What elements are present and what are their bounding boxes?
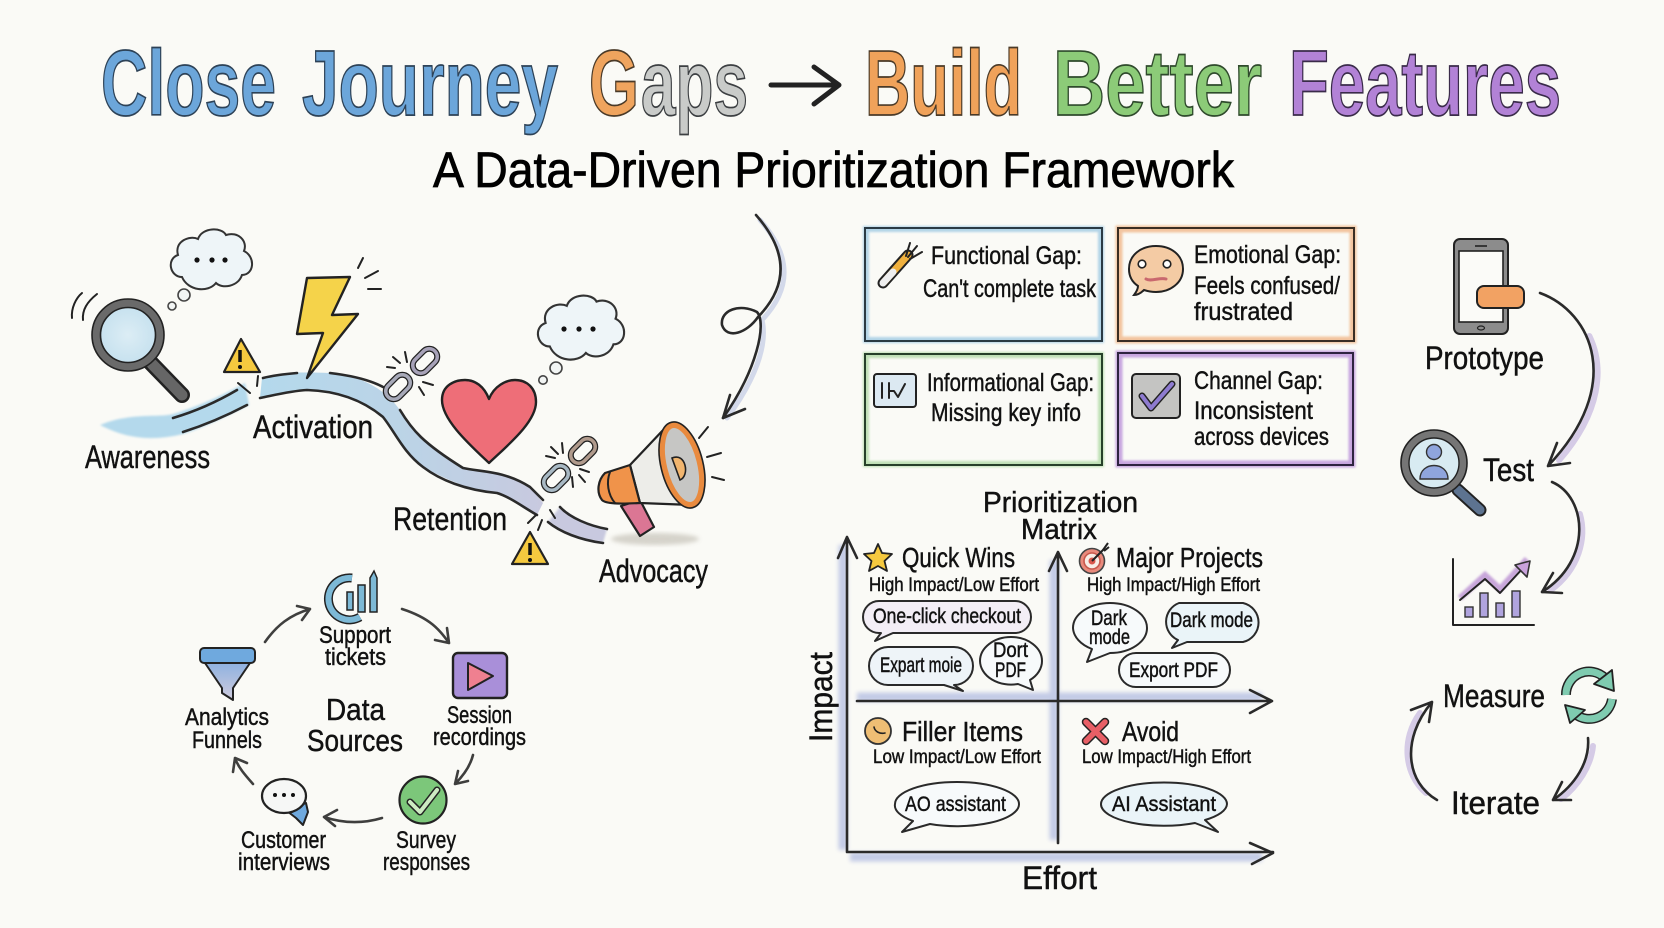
journey ribbon [100, 373, 607, 543]
label: customer interviews: interviews [238, 849, 330, 876]
label: session recordings: recordings [433, 724, 526, 751]
title: aps [641, 31, 748, 135]
arrow: title arrow [771, 67, 839, 104]
label: test: Test [1483, 452, 1534, 488]
quadrant: quick wins [863, 542, 1042, 691]
icon: lightning bolt [297, 258, 381, 378]
bubble: one-click checkout [863, 601, 1031, 641]
quadrant: quick wins: High Impact/Low Effort [869, 574, 1039, 596]
icon: pencil tool [883, 243, 922, 283]
arrow: test to measure chart [1542, 482, 1582, 594]
icon: magnifier [72, 293, 182, 395]
icon: clock coin [865, 718, 891, 744]
panel: data sources [185, 571, 526, 876]
label: analytics funnels: Funnels [192, 727, 262, 754]
label: survey responses [383, 827, 470, 876]
bubble: dark mode round [1073, 603, 1147, 662]
icon: warning 2 [512, 532, 548, 564]
arrows: data source cycle [233, 606, 473, 826]
heading: data sources: Data [326, 692, 386, 727]
panel: gap types [865, 228, 1354, 465]
heading: prioritization matrix: Matrix [1021, 514, 1097, 546]
label: Activation: Activation [253, 409, 373, 445]
card: informational gap: Informational Gap: [927, 369, 1094, 397]
bubble: dort pdf: Dort [993, 639, 1028, 662]
icon: chat bubble [262, 779, 308, 825]
arrow: iterate to measure [1407, 702, 1437, 800]
heading: data sources [307, 692, 403, 758]
card: channel gap: across devices [1194, 423, 1329, 451]
icon: red x [1086, 722, 1105, 741]
heading: data sources: Sources [307, 723, 403, 758]
card: functional gap: Can't complete task [923, 275, 1096, 303]
label: survey responses: responses [383, 849, 470, 876]
bubble: expart moie: Expart moie [880, 654, 962, 677]
icon: thought cloud 1 [168, 229, 252, 310]
label: survey responses: Survey [396, 827, 456, 854]
bubble: ai assistant: AI Assistant [1112, 793, 1216, 816]
icon: checkbox [1132, 374, 1180, 418]
label: analytics funnels [185, 704, 269, 754]
quadrant: avoid: Avoid [1122, 716, 1179, 747]
arrow: prototype to test [1540, 293, 1598, 468]
title: Better [1053, 31, 1262, 135]
icon: phone prototype [1454, 239, 1524, 334]
title: Journey [302, 31, 558, 135]
bubble: export pdf [1119, 653, 1230, 687]
icon: broken chain 1 [382, 345, 441, 403]
label: analytics funnels: Analytics [185, 704, 269, 731]
bubble: dark mode pill: Dark mode [1170, 609, 1253, 632]
bubble: ai assistant garbled: AO assistant [905, 793, 1006, 816]
arrow: loop into megaphone [722, 215, 784, 418]
quadrant: filler items [865, 716, 1042, 832]
card: functional gap [865, 228, 1102, 341]
icon: green check [400, 776, 446, 824]
icon: megaphone [598, 417, 724, 545]
bubble: dort pdf [980, 637, 1042, 690]
quadrant: quick wins: Quick Wins [902, 542, 1015, 573]
bubble: ai assistant garbled [895, 782, 1019, 832]
label: Advocacy: Advocacy [599, 553, 708, 589]
card: functional gap: Functional Gap: [931, 242, 1082, 270]
quadrant: major projects [1073, 542, 1263, 687]
card: channel gap: Inconsistent [1194, 397, 1313, 425]
card: channel gap [1118, 353, 1353, 465]
icon: refresh cycle [1565, 670, 1614, 723]
title: Close [101, 31, 276, 135]
label: customer interviews [238, 827, 330, 876]
bubble: dark mode round: Dark [1091, 607, 1127, 630]
icon: support tickets [328, 571, 377, 620]
label: support tickets: Support [319, 622, 391, 649]
quadrant: avoid [1082, 716, 1251, 832]
label: Retention: Retention [393, 501, 507, 537]
card: emotional gap: Emotional Gap: [1194, 241, 1341, 269]
title: G [589, 31, 639, 135]
quadrant: avoid: Low Impact/High Effort [1082, 746, 1251, 768]
card: informational gap: Missing key info [931, 399, 1081, 427]
card: emotional gap [1118, 228, 1354, 341]
label: measure: Measure [1443, 678, 1545, 714]
bubble: expart moie [869, 647, 973, 691]
title [101, 31, 1561, 135]
bubble: one-click checkout: One-click checkout [873, 605, 1021, 628]
bubble: ai assistant [1101, 782, 1227, 832]
card: emotional gap: Feels confused/ [1194, 272, 1340, 300]
heading: prioritization matrix: Prioritization [983, 487, 1138, 519]
quadrant: major projects: High Impact/High Effort [1087, 574, 1260, 596]
quadrant: filler items: Filler Items [902, 716, 1023, 747]
panel: customer journey [72, 215, 784, 589]
icon: broken chain 2 [540, 435, 599, 494]
card: channel gap: Channel Gap: [1194, 367, 1323, 395]
label: session recordings: Session [447, 702, 512, 729]
panel: prioritization matrix [803, 487, 1273, 896]
label: support tickets [319, 622, 391, 671]
quadrant: major projects: Major Projects [1116, 542, 1263, 573]
heading: prioritization matrix [983, 487, 1138, 546]
icon: heart [442, 380, 536, 463]
panel: build-measure loop [1401, 239, 1614, 821]
card: emotional gap: frustrated [1194, 298, 1293, 326]
axis label: impact: Impact [803, 652, 839, 742]
icon: funnel [200, 648, 255, 700]
icon: growth chart [1453, 559, 1534, 625]
title: Build [865, 31, 1022, 135]
icon: star [864, 544, 892, 571]
icon: warning 1 [224, 339, 260, 372]
label: session recordings [433, 702, 526, 751]
bubble: dort pdf: PDF [995, 659, 1026, 682]
icon: user magnifier [1401, 430, 1480, 510]
subtitle: A Data-Driven Prioritization Framework [433, 142, 1235, 198]
bubble: dark mode pill [1166, 603, 1259, 648]
label: customer interviews: Customer [241, 827, 326, 854]
label: iterate: Iterate [1451, 785, 1540, 821]
icon: info chart [874, 374, 916, 407]
bubble: dark mode round: mode [1089, 626, 1130, 649]
icon: thought cloud 2 [538, 296, 624, 384]
label: support tickets: tickets [325, 644, 386, 671]
bubble: export pdf: Export PDF [1129, 659, 1218, 682]
axis label: effort: Effort [1022, 860, 1097, 896]
label: prototype: Prototype [1425, 340, 1544, 376]
icon: target [1080, 543, 1109, 574]
quadrant: filler items: Low Impact/Low Effort [873, 746, 1042, 768]
card: informational gap [865, 354, 1102, 465]
icon: emotion bubble [1129, 246, 1183, 295]
matrix axes [838, 537, 1273, 864]
label: Awareness: Awareness [85, 439, 210, 475]
arrow: measure to iterate [1553, 738, 1593, 800]
icon: play video [453, 653, 507, 698]
